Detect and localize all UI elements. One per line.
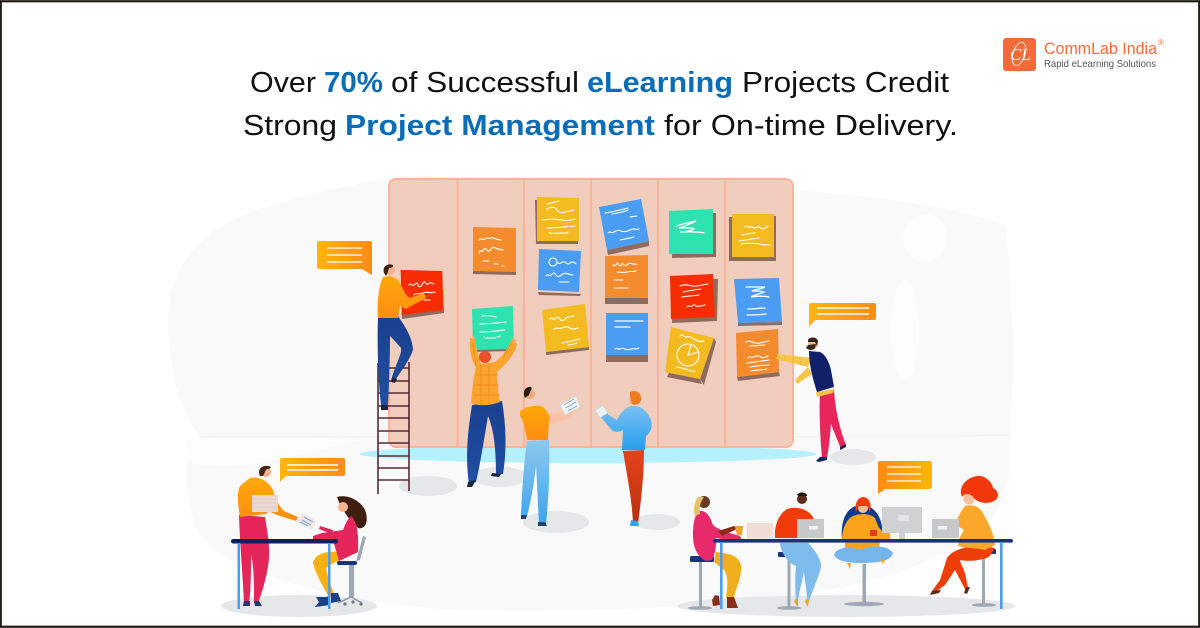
note: green column 5 xyxy=(669,209,716,258)
logo: CommLab India: ® xyxy=(1158,38,1164,47)
man with papers xyxy=(238,466,298,606)
logo: CommLab India: CommLab India xyxy=(1044,39,1158,58)
title: of Successful xyxy=(391,67,579,99)
note: blue column 6 xyxy=(734,278,782,326)
figure: man in blue shirt with paper xyxy=(595,391,652,526)
document handed over xyxy=(296,513,317,529)
man with laptop xyxy=(775,492,824,610)
note: yellow column 6 top xyxy=(729,214,776,261)
desk shadow xyxy=(221,595,377,617)
title: Projects Credit xyxy=(742,67,949,99)
speech bubble: ladder man xyxy=(317,241,372,275)
floor shadows under the board figures xyxy=(399,449,876,533)
cyan floor reflection under board xyxy=(360,445,816,463)
note: blue column 4 xyxy=(606,313,648,362)
sticky notes xyxy=(401,197,782,385)
kanban board xyxy=(389,179,793,447)
speech bubble: right desk xyxy=(878,461,932,494)
speech bubble: vest man xyxy=(809,303,876,327)
note: yellow column 3 bottom xyxy=(542,304,589,355)
left desk group xyxy=(221,466,377,617)
note: blue tilted xyxy=(599,199,649,255)
woman cross-legged in chair xyxy=(834,497,893,606)
note: red xyxy=(401,270,444,319)
figure: man on ladder xyxy=(378,264,426,494)
title: eLearning xyxy=(587,67,733,99)
title xyxy=(243,67,958,142)
title: Over xyxy=(250,67,317,99)
logo: CommLab India xyxy=(1003,38,1164,71)
note: yellow column 3 top xyxy=(535,197,579,244)
note: yellow with pie chart xyxy=(665,327,716,385)
title: Strong xyxy=(243,110,337,142)
desk xyxy=(231,539,338,609)
title: for On-time Delivery. xyxy=(664,110,958,142)
note: red column 5 xyxy=(670,274,718,323)
stack of papers xyxy=(747,523,773,538)
coffee cup xyxy=(735,526,743,535)
right desk group xyxy=(677,476,1015,617)
note: orange column 4 xyxy=(605,255,648,304)
note: orange column 6 bottom xyxy=(736,329,780,381)
title: Project Management xyxy=(345,110,656,142)
chair xyxy=(337,536,366,606)
woman with headset on stool xyxy=(688,496,742,610)
background wall and floor blob xyxy=(168,176,1013,610)
woman seated xyxy=(313,496,367,607)
long desk xyxy=(713,539,1013,609)
note: green held up xyxy=(472,306,514,352)
figure: man in yellow t-shirt with paper xyxy=(520,387,580,526)
figure: man in plaid holding green note xyxy=(467,334,517,487)
note: orange column 2 xyxy=(473,227,516,275)
note: blue column 3 xyxy=(538,249,581,296)
title: 70% xyxy=(324,67,383,99)
desk shadow xyxy=(677,595,1015,617)
figure: man in navy vest xyxy=(776,337,846,462)
woman with red hair xyxy=(930,476,998,607)
desktop monitor xyxy=(882,507,922,539)
speech bubble: left desk xyxy=(280,458,345,482)
logo: CommLab India: Rapid eLearning Solutions xyxy=(1044,58,1156,70)
logo: CommLab India: CL xyxy=(1010,45,1031,64)
ladder xyxy=(378,362,409,494)
